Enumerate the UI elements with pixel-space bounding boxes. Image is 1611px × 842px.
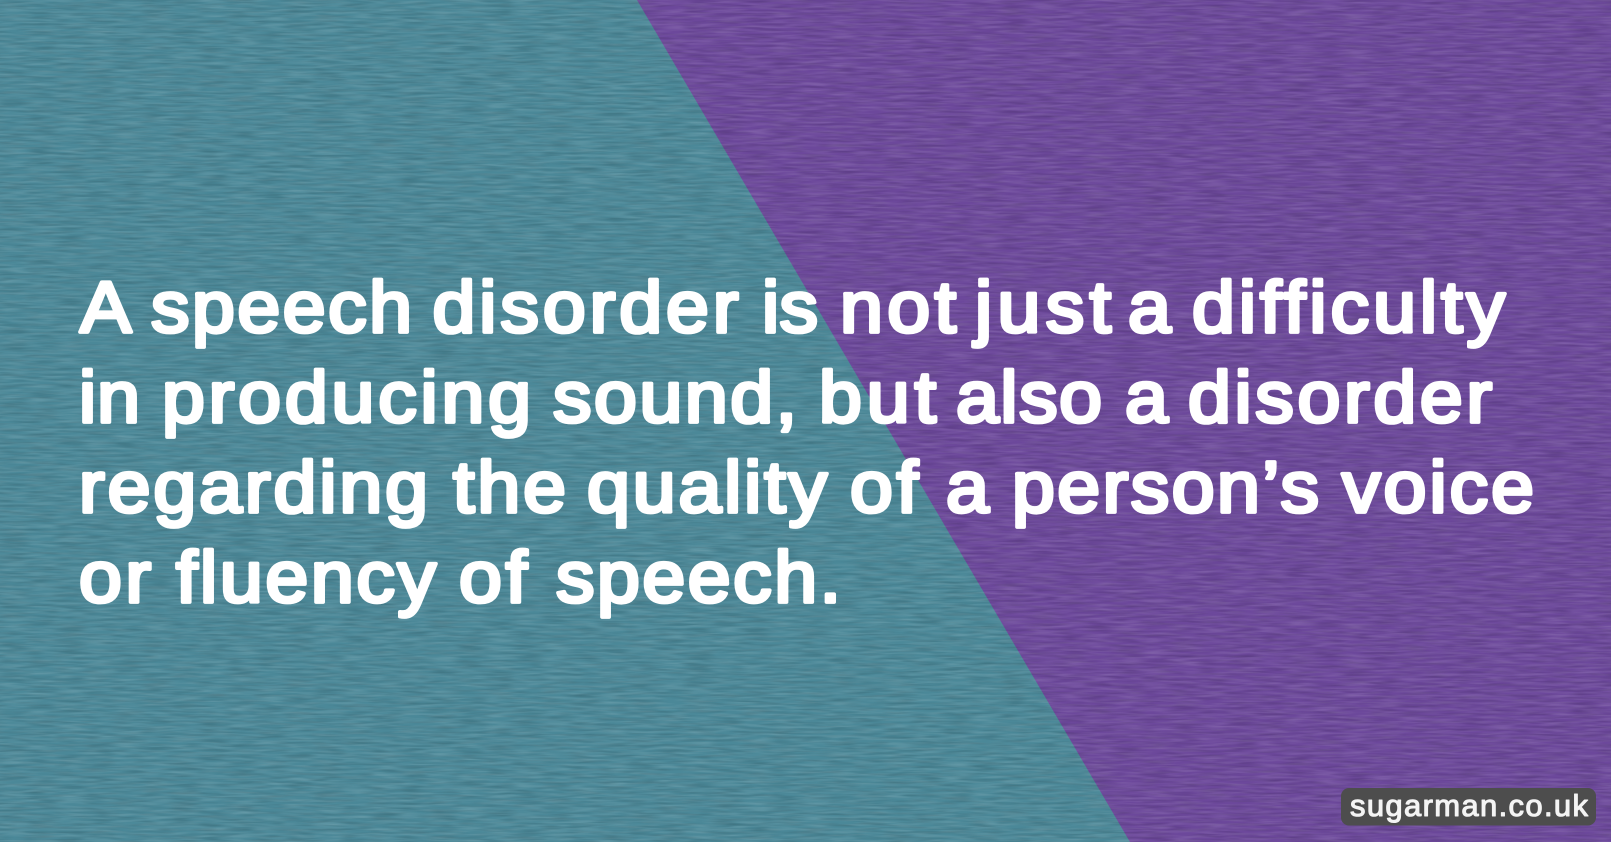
heading: quote text: person’s [1012,447,1319,527]
heading: quote text: producing [162,357,531,437]
heading: quote text: voice [1342,447,1534,527]
heading: quote text: a [1125,357,1168,437]
heading: quote text: disorder [433,267,739,347]
heading: quote text: not [840,267,956,347]
heading: quote text: of [459,537,527,617]
heading: quote text: a [1128,267,1171,347]
badge: sugarman.co.uk: sugarman.co.uk [1350,788,1588,823]
heading: quote text: or [79,537,151,617]
heading: quote text: just [973,267,1111,347]
heading: quote text: fluency [176,537,437,617]
heading: quote text: of [850,447,918,527]
panel: purple diagonal background [637,0,1611,842]
heading: quote text: also [956,357,1102,437]
heading: quote text: A [80,267,132,347]
heading: quote text: is [762,267,818,347]
heading: quote text: speech [151,267,412,347]
heading: quote text [79,267,1534,617]
heading: quote text: quality [587,447,828,527]
heading: quote text: difficulty [1192,267,1506,347]
heading: quote text: but [819,357,936,437]
heading: quote text: the [453,447,566,527]
heading: quote text: in [79,357,140,437]
heading: quote text: disorder [1188,357,1492,437]
heading: quote text: sound, [553,357,797,437]
heading: quote text: a [946,447,989,527]
heading: quote text: regarding [79,447,428,527]
heading: quote text: speech. [556,537,841,617]
